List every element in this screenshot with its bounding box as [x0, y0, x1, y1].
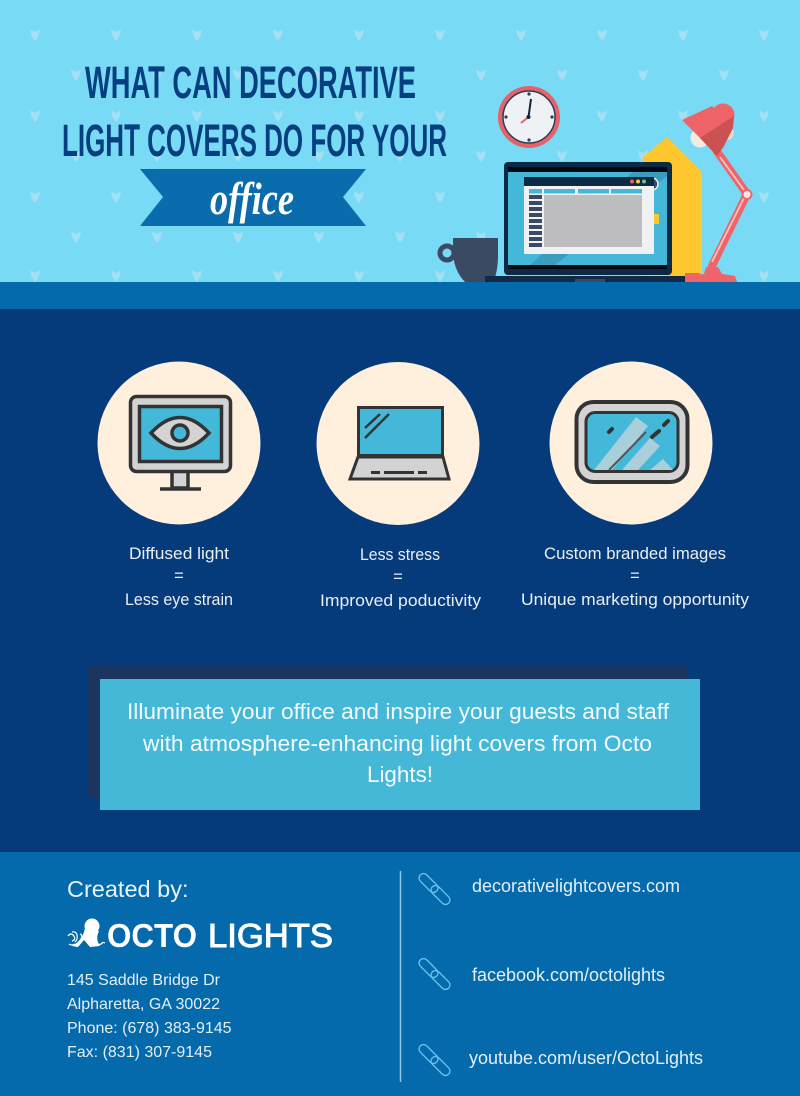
- text: less stress caption: =: [393, 568, 403, 586]
- text: custom images caption: [521, 545, 750, 609]
- icon: link 1: [417, 872, 452, 906]
- heading: created by: Created by:: [67, 876, 188, 902]
- text: diffused light caption: =: [174, 567, 184, 585]
- panel: header background: [0, 0, 800, 282]
- logo: octo lights: [68, 917, 333, 954]
- text: address: Alpharetta, GA 30022: [67, 996, 220, 1013]
- logo: octo lights: LIGHTS: [208, 917, 333, 954]
- text: less stress caption: Improved poductivity: [320, 592, 482, 610]
- icon: desk lamp: [682, 104, 752, 282]
- panel: shelf band: [0, 282, 800, 309]
- text: callout message: Illuminate your office and inspire your guests and staff: [127, 699, 670, 724]
- text: website link: decorativelightcovers.com: [472, 876, 680, 896]
- panel: footer: [0, 852, 800, 1096]
- text: address: [67, 972, 232, 1061]
- text: address: Phone: (678) 383-9145: [67, 1020, 232, 1037]
- icon: coffee cup: [440, 238, 498, 282]
- panel: custom branded images: [521, 362, 750, 609]
- text: youtube link: youtube.com/user/OctoLights: [469, 1048, 703, 1068]
- text: diffused light caption: Diffused light: [129, 545, 229, 563]
- text: less stress caption: [320, 546, 482, 610]
- logo: octo lights: OCTO: [107, 917, 197, 954]
- text: less stress caption: Less stress: [360, 546, 440, 564]
- icon: laptop outline: [350, 408, 449, 479]
- text: callout message: Lights!: [367, 762, 433, 787]
- icon: link 2: [417, 957, 452, 991]
- title: WHAT CAN DECORATIVE: [85, 57, 416, 108]
- title: LIGHT COVERS DO FOR YOUR: [62, 115, 447, 166]
- text: custom images caption: Custom branded images: [544, 545, 726, 563]
- icon: monitor with eye: [130, 396, 230, 489]
- text: diffused light caption: Less eye strain: [125, 591, 233, 609]
- text: callout message: [127, 699, 670, 787]
- icon: yellow folder: [643, 137, 702, 276]
- callout: [88, 666, 700, 810]
- text: address: 145 Saddle Bridge Dr: [67, 972, 221, 989]
- icon: wall clock: [498, 86, 560, 148]
- text: facebook link: facebook.com/octolights: [472, 965, 665, 985]
- ribbon: office: office: [210, 174, 294, 224]
- panel: diffused light: [98, 362, 260, 609]
- icon: link 3: [417, 1043, 452, 1077]
- icon: laptop: [485, 162, 695, 282]
- text: callout message: with atmosphere-enhancing light covers from Octo: [142, 731, 652, 756]
- text: address: Fax: (831) 307-9145: [67, 1044, 212, 1061]
- text: custom images caption: Unique marketing opportunity: [521, 591, 750, 609]
- panel: less stress: [316, 362, 482, 610]
- text: diffused light caption: [125, 545, 233, 609]
- text: custom images caption: =: [630, 567, 640, 585]
- ribbon: office: [140, 169, 366, 226]
- panel: benefits background: [0, 309, 800, 852]
- icon: tablet with reflections: [576, 402, 688, 482]
- title: [62, 57, 447, 166]
